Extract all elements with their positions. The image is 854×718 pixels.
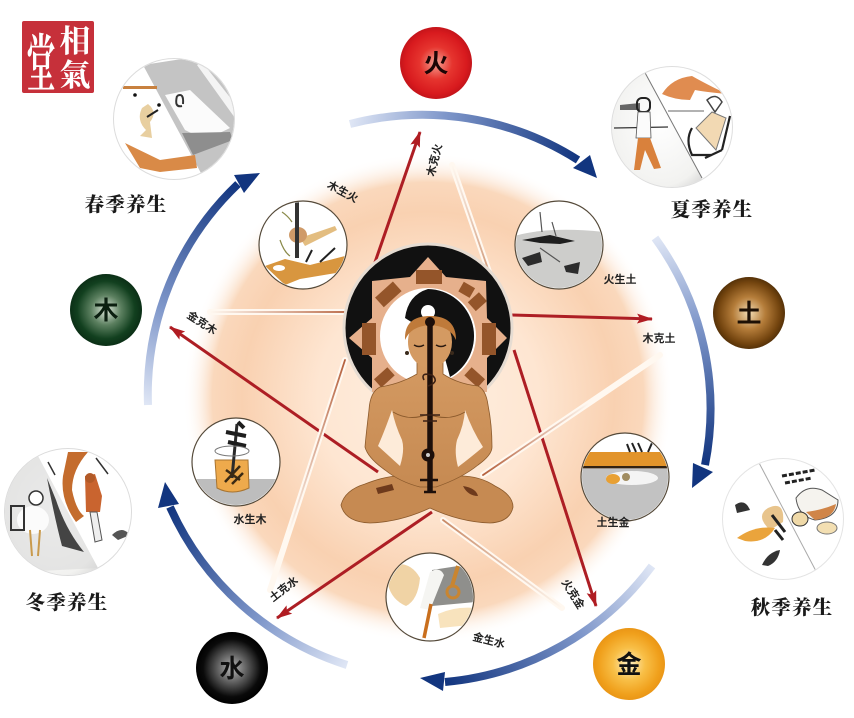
season ring: autumn (722, 458, 844, 580)
season illustration: autumn (735, 464, 838, 570)
element: metal (593, 628, 665, 700)
seal stamp: 相 (60, 24, 90, 59)
peach glow disc (183, 153, 673, 643)
cycle arrow: metal to water (420, 566, 652, 691)
controlling label: fire controls metal: 火克金 (559, 576, 588, 612)
season label: autumn: 秋季养生 (751, 596, 833, 619)
cycle arrow: fire to earth (350, 115, 597, 178)
controlling label: metal controls wood: 金克木 (185, 308, 220, 338)
element: water: 水 (219, 655, 245, 683)
season label: winter: 冬季养生 (26, 591, 108, 614)
seal stamp (22, 21, 94, 100)
generating label: wood generates fire: 木生火 (325, 178, 361, 205)
element: wood: 木 (93, 297, 119, 325)
element: water (196, 632, 268, 704)
season ring: summer (612, 66, 732, 188)
gear blocks (362, 270, 496, 387)
inner scene: metal generates water (386, 553, 476, 641)
inner scene: earth generates metal (580, 433, 670, 525)
seal stamp: 氣 (60, 58, 90, 93)
controlling label: wood controls fire: 木克火 (423, 142, 445, 178)
central meditating figure with halo (341, 244, 513, 523)
season label: summer: 夏季养生 (671, 198, 753, 221)
generating label: fire generates earth: 火生土 (604, 272, 636, 286)
season illustration: spring (123, 60, 234, 172)
chest lines (393, 412, 465, 476)
controlling label: wood controls earth: 木克土 (642, 331, 676, 345)
cycle arrow: water to wood (158, 482, 347, 665)
five-pointed star lines (210, 165, 660, 608)
season illustration: summer (612, 73, 731, 187)
season ring: winter (4, 448, 132, 576)
element: fire (400, 27, 472, 99)
seal stamp: 堂 (27, 31, 55, 100)
feet details (376, 484, 394, 494)
central energy channel (427, 320, 433, 492)
gear ring (349, 257, 507, 392)
torso and arms (365, 360, 492, 487)
inner scene: water generates wood (190, 418, 282, 509)
season illustration: winter (5, 452, 128, 575)
element: earth: 土 (736, 300, 762, 328)
head (408, 316, 452, 368)
controlling label: earth controls water: 土克水 (266, 573, 301, 605)
season label: spring: 春季养生 (85, 193, 167, 216)
cycle arrow: wood to fire (148, 173, 260, 405)
season ring: spring (114, 58, 234, 180)
inner scene: fire generates earth (514, 201, 604, 292)
generating label: earth generates metal: 土生金 (596, 515, 630, 529)
inner scene: wood generates fire (259, 201, 347, 289)
generating label: metal generates water: 金生水 (471, 629, 507, 651)
element: wood (70, 274, 142, 346)
generating label: water generates wood: 水生木 (234, 512, 266, 526)
red controlling arrows (170, 132, 652, 618)
cycle arrow: earth to metal (655, 238, 713, 488)
element: metal: 金 (616, 651, 642, 679)
element: fire: 火 (423, 50, 449, 78)
yin yang circle (380, 288, 476, 384)
element: earth (713, 277, 785, 349)
crossed legs (341, 476, 513, 523)
gaps between arms and torso (378, 410, 403, 466)
halo disc (344, 244, 512, 412)
